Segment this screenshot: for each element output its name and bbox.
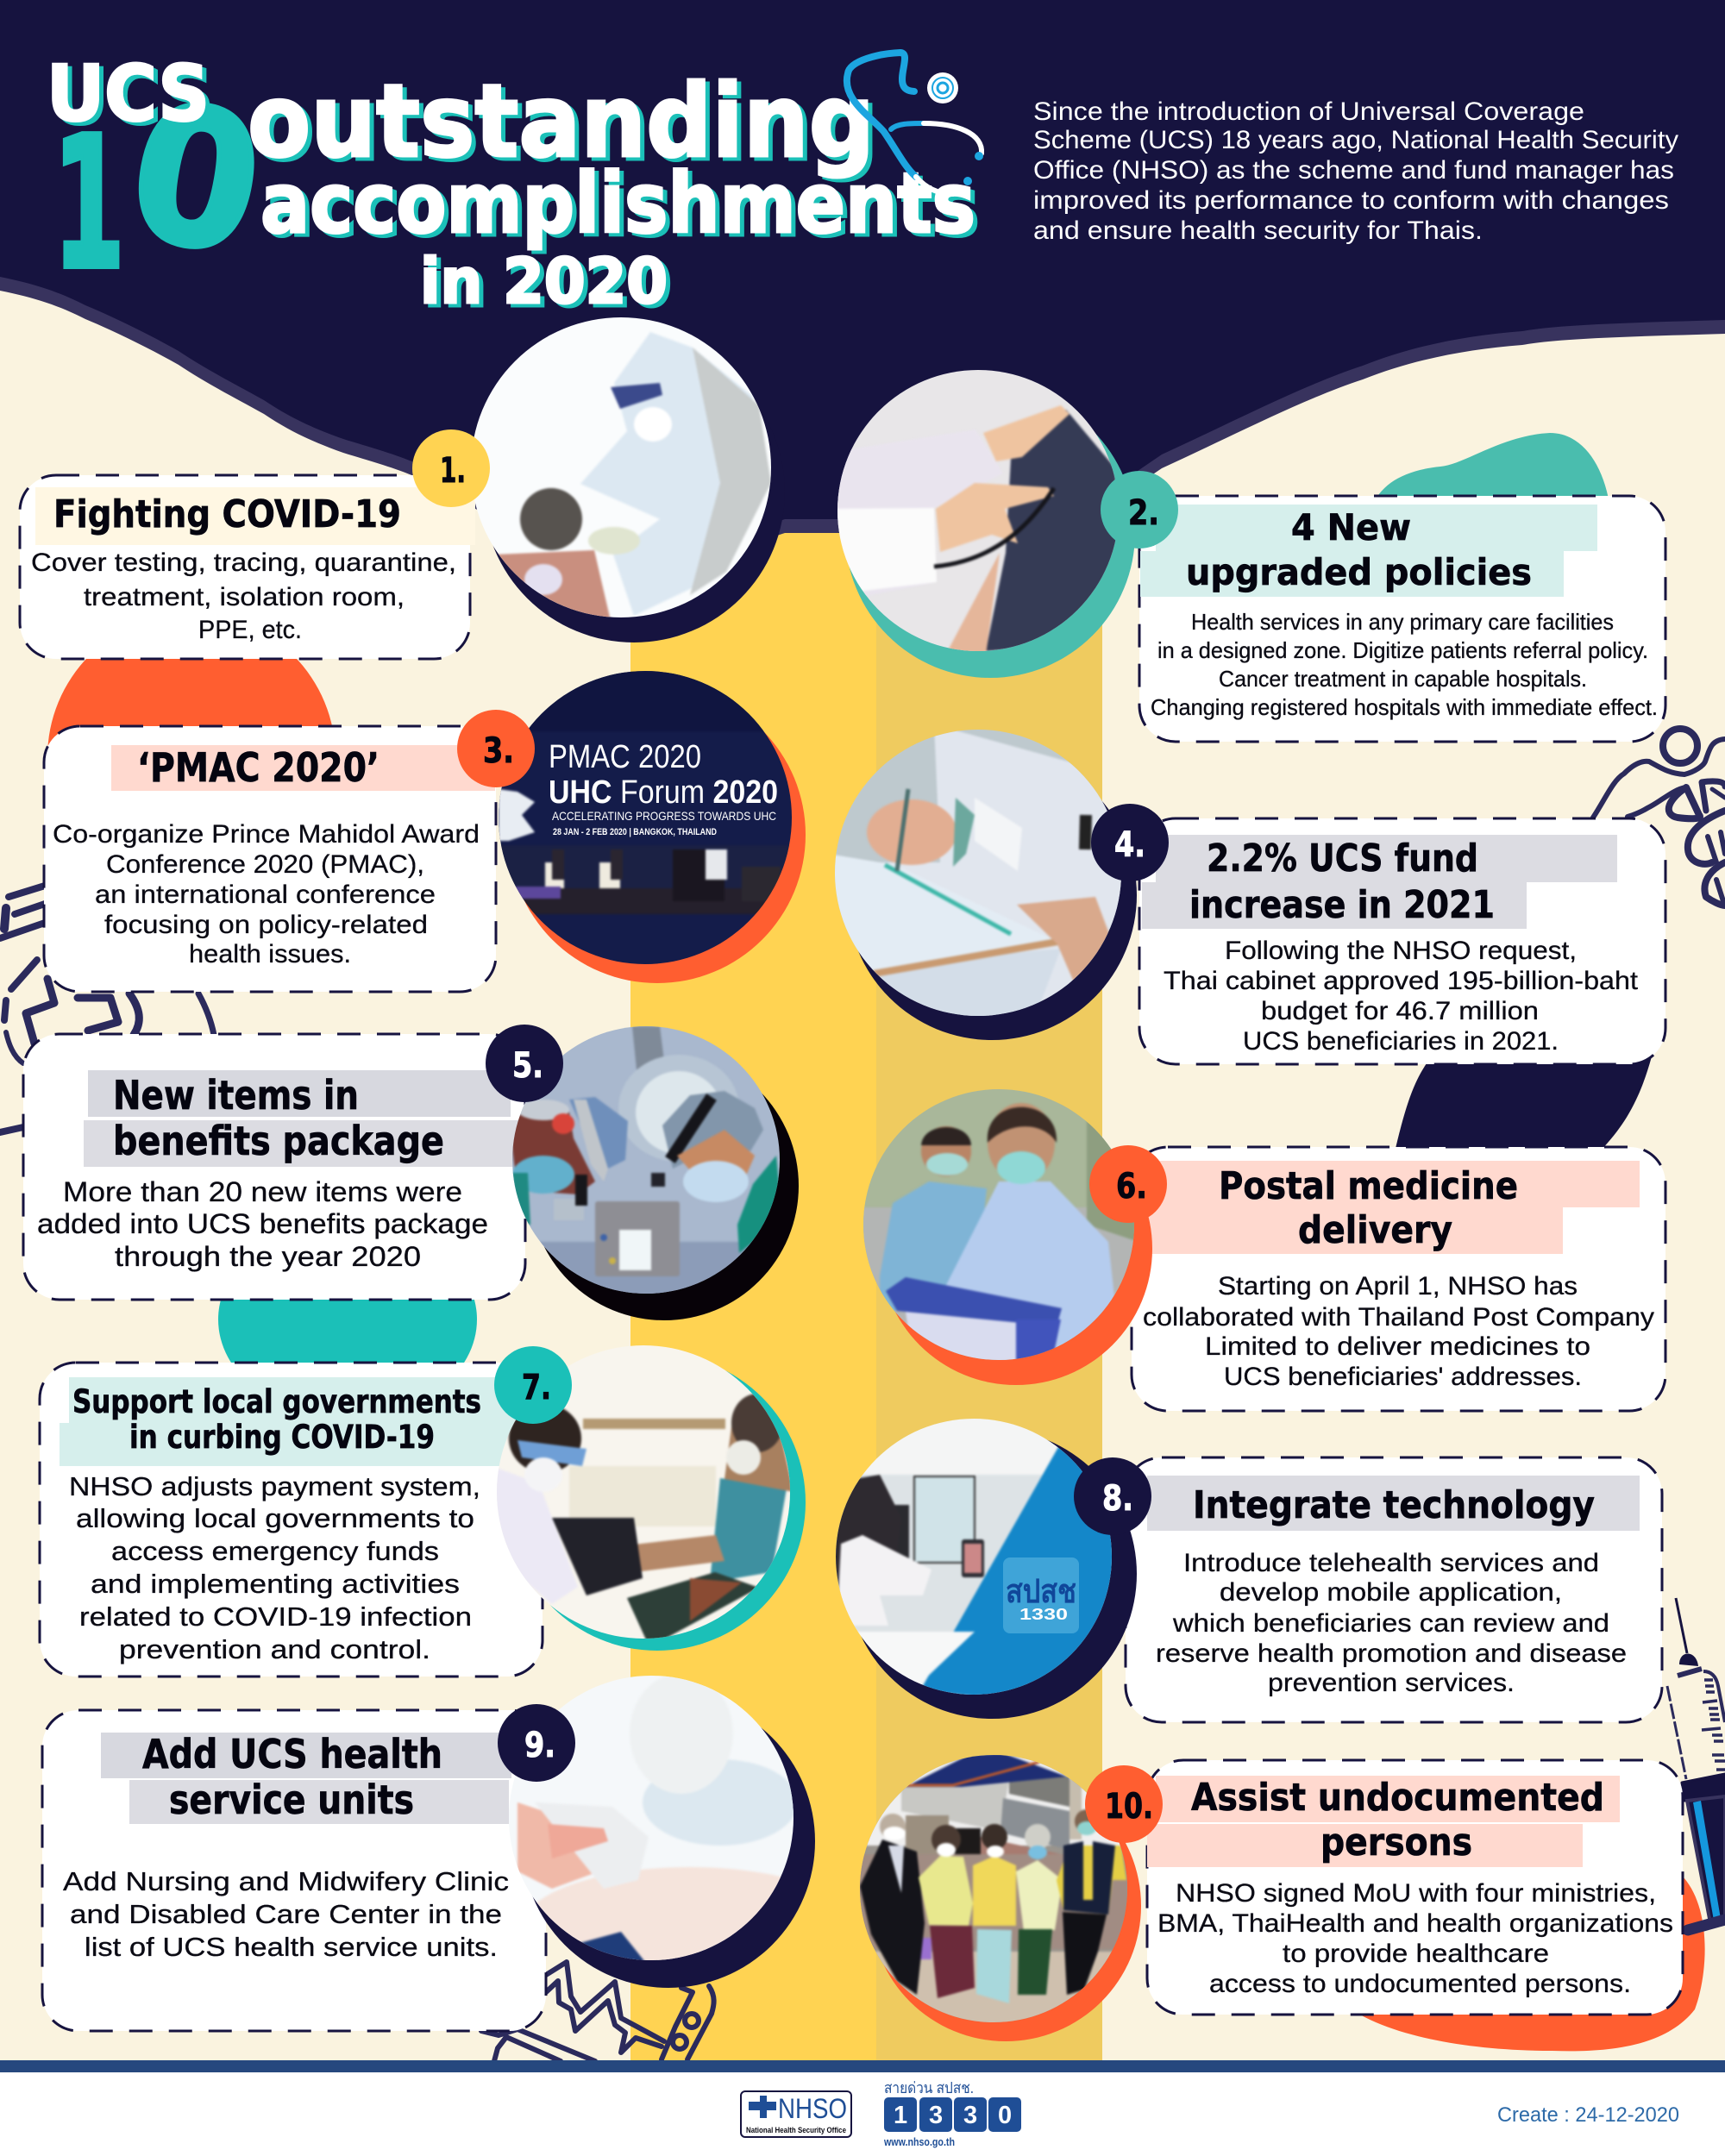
body text: which beneficiaries can review and — [1172, 1609, 1609, 1638]
heading — [1186, 506, 1532, 593]
heading — [72, 1383, 481, 1456]
body text — [69, 1471, 480, 1664]
body text — [37, 1176, 488, 1272]
icon: stethoscope — [847, 53, 983, 194]
heading — [142, 1731, 442, 1823]
body text: Co-organize Prince Mahidol Award — [53, 820, 480, 849]
blob: teal behind card 2 — [1371, 433, 1610, 509]
heading: New items in — [113, 1072, 359, 1119]
photo 1: swab test — [471, 317, 785, 642]
item 1: Fighting COVID-19 — [20, 317, 785, 659]
logo: hotline 1330: 1 — [894, 2102, 907, 2129]
body text: Thai cabinet approved 195-billion-baht — [1164, 967, 1639, 995]
body text: UCS beneficiaries' addresses. — [1224, 1363, 1582, 1391]
body text — [1143, 1272, 1654, 1391]
body text: prevention and control. — [119, 1634, 430, 1664]
body text: develop mobile application, — [1220, 1578, 1562, 1607]
panel: card 3 — [44, 726, 496, 992]
body text: focusing on policy-related — [104, 911, 428, 939]
heading: 4 New — [1291, 506, 1411, 548]
heading: 2.2% UCS fund — [1207, 837, 1478, 881]
heading: Postal medicine — [1219, 1164, 1518, 1208]
body text — [1157, 1879, 1673, 1998]
heading band — [60, 1377, 518, 1466]
heading: delivery — [1298, 1208, 1452, 1252]
body text: BMA, ThaiHealth and health organizations — [1157, 1909, 1673, 1938]
badge 5 — [486, 1025, 563, 1102]
create date: Create : 24-12-2020 — [1497, 2103, 1679, 2127]
line art: phone and heartbeat at bottom — [481, 1962, 714, 2061]
heading — [1219, 1164, 1518, 1252]
heading: upgraded policies — [1186, 551, 1532, 593]
body text: and Disabled Care Center in the — [70, 1899, 502, 1929]
badge 3 — [457, 710, 535, 787]
heading: in curbing COVID-19 — [129, 1419, 435, 1456]
forum title text: PMAC 2020 — [549, 739, 701, 775]
body text — [31, 548, 456, 644]
photo 6: medicine box — [862, 1089, 1152, 1385]
yellow vertical band — [630, 517, 876, 2061]
app logo: สปสช — [1006, 1574, 1076, 1610]
title number 10 — [53, 61, 276, 310]
title — [47, 48, 975, 317]
item 4: 2.2% UCS fund — [828, 724, 1665, 1064]
body text: prevention services. — [1268, 1669, 1515, 1697]
forum title text: 28 JAN - 2 FEB 2020 | BANGKOK, THAILAND — [553, 827, 717, 837]
body text: Conference 2020 (PMAC), — [106, 850, 424, 879]
item 9: Add UCS health service units — [42, 1673, 858, 2031]
app logo — [1003, 1557, 1079, 1633]
heading — [1189, 837, 1495, 927]
heading band — [111, 745, 495, 791]
title words: in 2020 — [420, 245, 668, 317]
badge 6 — [1089, 1145, 1167, 1223]
badge 7: 7. — [522, 1368, 551, 1407]
title words: accomplishments — [260, 155, 975, 252]
body text: access to undocumented persons. — [1209, 1970, 1631, 1998]
item 5: New items in benefits package — [23, 1025, 799, 1320]
heading: Add UCS health — [142, 1731, 442, 1777]
photo 4: doctor signing — [828, 724, 1137, 1040]
body text — [1156, 1549, 1627, 1697]
navy header wave — [0, 0, 1725, 586]
heading band — [35, 487, 475, 545]
footer background — [0, 2072, 1725, 2156]
heading: Support local governments — [72, 1383, 481, 1420]
badge 5: 5. — [512, 1046, 543, 1086]
body text — [1164, 937, 1639, 1056]
badge 8: 8. — [1102, 1479, 1133, 1519]
heading: Assist undocumented — [1191, 1776, 1604, 1820]
body text: to provide healthcare — [1283, 1940, 1549, 1968]
line art: syringe — [1667, 1598, 1725, 1930]
title words — [47, 48, 975, 317]
forum title text: ACCELERATING PROGRESS TOWARDS UHC — [552, 809, 776, 823]
body text: through the year 2020 — [115, 1241, 421, 1272]
heading band — [1140, 505, 1597, 597]
photo 7: local care visit — [492, 1345, 806, 1651]
panel: card 4 — [1139, 818, 1665, 1064]
heading — [113, 1072, 444, 1164]
blob: orange behind card 10 — [1339, 1871, 1705, 2051]
body text: list of UCS health service units. — [85, 1932, 498, 1962]
body text — [1151, 609, 1658, 720]
title words: UCS — [47, 48, 210, 138]
logo: hotline 1330: 3 — [929, 2102, 943, 2129]
body text: Health services in any primary care facilities — [1191, 609, 1614, 635]
photo 8: telehealth and mobile app — [828, 1414, 1147, 1719]
heading band — [1142, 835, 1617, 929]
heading: ‘PMAC 2020’ — [137, 744, 380, 791]
item 7: Support local governments — [40, 1345, 806, 1677]
body text: Introduce telehealth services and — [1183, 1549, 1599, 1577]
intro text: and ensure health security for Thais. — [1033, 216, 1483, 245]
intro text: improved its performance to conform with changes — [1033, 186, 1669, 215]
body text: health issues. — [189, 940, 351, 968]
badge 10 — [1085, 1765, 1163, 1843]
body text: Limited to deliver medicines to — [1205, 1332, 1590, 1361]
heading: benefits package — [113, 1118, 444, 1164]
photo 3: PMAC forum stage — [492, 671, 806, 983]
body text: and implementing activities — [91, 1569, 460, 1599]
body text: Add Nursing and Midwifery Clinic — [63, 1866, 509, 1896]
panel: card 6 — [1132, 1147, 1665, 1411]
heading: Fighting COVID-19 — [53, 492, 401, 536]
body text: in a designed zone. Digitize patients referral policy. — [1157, 637, 1648, 663]
logo: NHSO: National Health Security Office — [746, 2126, 846, 2135]
heading band — [84, 1070, 519, 1167]
blob: teal behind cards 5 and 7 — [218, 1220, 477, 1419]
badge 4: 4. — [1114, 825, 1145, 865]
footer — [0, 2060, 1725, 2156]
heading band — [1147, 1776, 1620, 1867]
intro text: Office (NHSO) as the scheme and fund manager has — [1033, 156, 1674, 185]
body text: an international conference — [95, 881, 436, 909]
item 3: PMAC 2020 — [44, 671, 806, 992]
intro text: Scheme (UCS) 18 years ago, National Health Security — [1033, 126, 1678, 154]
blob: orange behind cards 1 and 3 — [47, 613, 336, 901]
badge 8 — [1074, 1457, 1151, 1535]
title number 10: 1 — [53, 97, 125, 310]
body text: reserve health promotion and disease — [1156, 1639, 1627, 1668]
badge 1: 1. — [440, 451, 466, 491]
body text: allowing local governments to — [76, 1503, 474, 1533]
item 10: Assist undocumented persons — [854, 1751, 1683, 2041]
panel: card 5 — [23, 1034, 525, 1300]
panel: card 1 — [20, 475, 475, 659]
badge 7 — [494, 1346, 572, 1424]
body text: UCS beneficiaries in 2021. — [1243, 1027, 1559, 1056]
footer bar — [0, 2060, 1725, 2072]
heading band — [1147, 1476, 1640, 1531]
photo 10: group of people — [854, 1751, 1141, 2041]
body text: NHSO signed MoU with four ministries, — [1176, 1879, 1656, 1908]
photo 2: stethoscope exam — [828, 370, 1135, 678]
heading: increase in 2021 — [1189, 883, 1495, 927]
logo: NHSO — [741, 2091, 851, 2137]
body text: Cover testing, tracing, quarantine, — [31, 548, 456, 577]
panel: card 9 — [42, 1710, 546, 2031]
forum title text: UHC Forum 2020 — [549, 774, 778, 811]
heading band — [101, 1733, 511, 1824]
forum title text — [549, 739, 778, 837]
photo 5: surgeons — [509, 1026, 799, 1320]
body text — [63, 1866, 509, 1962]
line art: virus and heartbeat on left — [0, 886, 214, 1132]
heading — [1191, 1776, 1604, 1865]
intro text — [1033, 97, 1678, 245]
body text: added into UCS benefits package — [37, 1208, 488, 1239]
logo: hotline 1330 — [883, 2079, 1021, 2148]
badge 1 — [412, 429, 490, 507]
panel: card 2 — [1139, 496, 1665, 742]
badge 3: 3. — [483, 731, 514, 771]
item 6: Postal medicine delivery — [862, 1089, 1665, 1411]
body text: treatment, isolation room, — [84, 583, 405, 611]
title number 10: 0 — [116, 61, 276, 298]
logo: hotline 1330: 3 — [963, 2102, 977, 2129]
badge 10: 10. — [1105, 1787, 1153, 1827]
logo: NHSO: NHSO — [778, 2093, 847, 2124]
badge 6: 6. — [1116, 1167, 1147, 1206]
body text: related to COVID-19 infection — [79, 1601, 472, 1632]
badge 9: 9. — [524, 1726, 555, 1765]
item 2: 4 New upgraded policies — [828, 370, 1665, 742]
body text: More than 20 new items were — [63, 1176, 462, 1207]
body text: collaborated with Thailand Post Company — [1143, 1303, 1654, 1332]
heading band — [1147, 1161, 1640, 1254]
darker yellow vertical band — [876, 517, 1102, 2061]
badge 9 — [498, 1704, 575, 1782]
badge 4 — [1091, 804, 1169, 881]
panel: card 10 — [1147, 1760, 1683, 2015]
body text: Starting on April 1, NHSO has — [1218, 1272, 1578, 1300]
body text: Changing registered hospitals with immediate effect. — [1151, 694, 1658, 720]
app logo: 1330 — [1019, 1606, 1068, 1623]
heading: persons — [1320, 1821, 1472, 1865]
body text: Cancer treatment in capable hospitals. — [1219, 666, 1587, 692]
item 8: Integrate technology — [828, 1414, 1662, 1722]
logo: hotline 1330: www.nhso.go.th — [883, 2135, 955, 2148]
photo 9: ultrasound — [509, 1676, 815, 1988]
badge 2 — [1101, 471, 1178, 548]
body text — [53, 820, 480, 968]
body text: NHSO adjusts payment system, — [69, 1471, 480, 1501]
badge 2: 2. — [1128, 493, 1159, 533]
heading: Integrate technology — [1193, 1483, 1595, 1527]
logo: hotline 1330: สายด่วน สปสช. — [884, 2079, 974, 2096]
blob: navy behind cards 4 and 6 — [1394, 1056, 1652, 1156]
body text: Following the NHSO request, — [1225, 937, 1577, 965]
heading: service units — [169, 1777, 414, 1823]
panel: card 7 — [40, 1363, 543, 1677]
intro text: Since the introduction of Universal Coverage — [1033, 97, 1584, 126]
line art: caduceus — [1593, 729, 1725, 906]
body text: access emergency funds — [111, 1536, 439, 1566]
logo: hotline 1330: 0 — [998, 2102, 1012, 2129]
title words: outstanding — [248, 62, 875, 180]
body text: PPE, etc. — [198, 616, 302, 644]
body text: budget for 46.7 million — [1261, 997, 1539, 1025]
panel: card 8 — [1126, 1457, 1662, 1722]
